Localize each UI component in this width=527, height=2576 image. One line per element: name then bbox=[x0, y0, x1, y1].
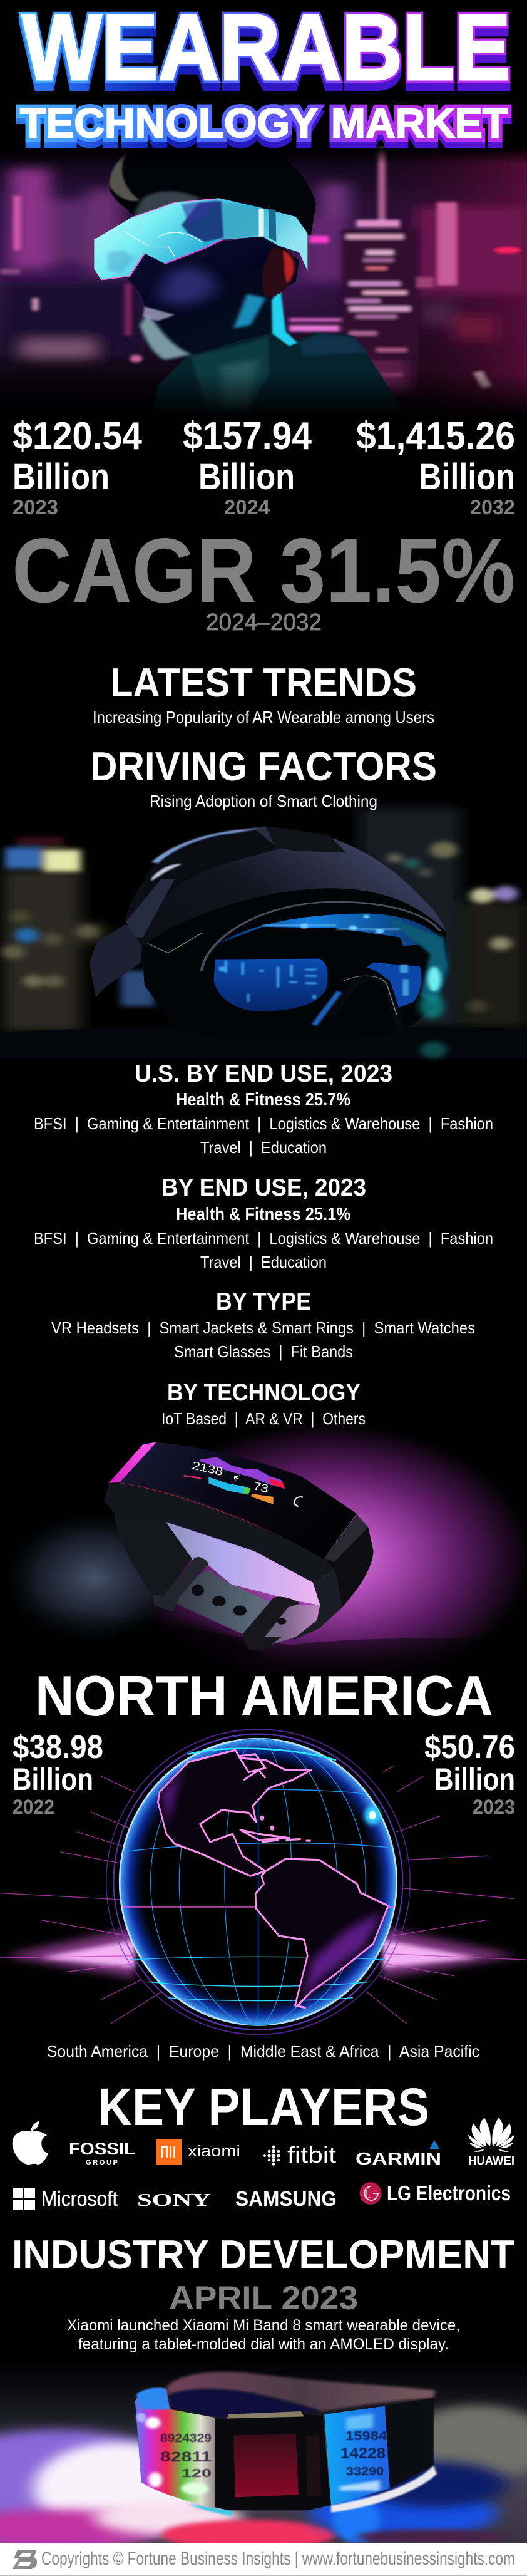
helmet upper cap bbox=[145, 830, 279, 916]
band display face bbox=[108, 1442, 357, 1560]
logo: Garmin bbox=[356, 2140, 441, 2168]
heading: industry development: INDUSTRY DEVELOPMENT bbox=[12, 2232, 514, 2277]
segment: by technology: IoT Based | AR & VR | Others bbox=[161, 1409, 366, 1428]
LED band scrolling digits: 33290 bbox=[346, 2465, 384, 2478]
LED band right panel bbox=[324, 2406, 390, 2505]
goggle nose frame bbox=[329, 978, 402, 1032]
LED band left panel bbox=[135, 2388, 215, 2508]
band display readings: 73 bbox=[252, 1479, 270, 1495]
logo: Xiaomi bbox=[156, 2139, 240, 2165]
development description: featuring a tablet-molded dial with an AMOLED display. bbox=[78, 2335, 449, 2353]
logo: Xiaomi: xiaomi bbox=[188, 2143, 240, 2160]
segment: global by end use: Health & Fitness 25.1% bbox=[176, 1204, 350, 1224]
logo: Fossil Group: FOSSIL bbox=[69, 2139, 135, 2158]
helmet visor frame bbox=[143, 888, 449, 1042]
lower white rim bbox=[331, 2466, 437, 2513]
stat: 2032 market value: 2032 bbox=[470, 496, 515, 519]
segment: U.S. by end use bbox=[34, 1060, 493, 1157]
continents outline: North and South America bbox=[158, 1750, 388, 2008]
title: TECHNOLOGY MARKET: MARKET bbox=[331, 100, 508, 146]
band icon arc bbox=[294, 1497, 303, 1506]
stat: North America 2022: Billion bbox=[13, 1762, 93, 1797]
stat: North America 2022: $38.98 bbox=[13, 1729, 103, 1766]
stat: North America 2023 bbox=[424, 1729, 515, 1818]
band clasps bbox=[152, 1557, 208, 1611]
stat: 2032 market value bbox=[356, 415, 515, 519]
city background bbox=[0, 148, 527, 415]
stat: 2024 market value: Billion bbox=[198, 457, 295, 497]
globe highlight bbox=[364, 1806, 381, 1825]
logo: Huawei: HUAWEI bbox=[468, 2154, 514, 2167]
lit inner opening bbox=[166, 1522, 320, 1605]
hero fade to black bbox=[0, 373, 527, 416]
logo: LG Electronics: L bbox=[364, 2188, 371, 2201]
title: TECHNOLOGY MARKET: TECHNOLOGY bbox=[20, 100, 318, 146]
stat: North America 2023: 2023 bbox=[473, 1796, 515, 1818]
stat: 2024 market value: $157.94 bbox=[183, 415, 312, 458]
logo: Sony: SONY bbox=[137, 2190, 211, 2210]
purple glow bbox=[0, 1424, 527, 1691]
globe illustration bbox=[0, 1729, 527, 2034]
visor right lens bbox=[366, 963, 421, 1008]
logo: Fossil Group bbox=[69, 2139, 135, 2166]
LED band illustration bbox=[0, 2361, 527, 2556]
title: TECHNOLOGY MARKET bbox=[20, 100, 508, 152]
text: driving factor detail: Rising Adoption of Smart Clothing bbox=[150, 792, 377, 810]
band side wall bbox=[105, 1482, 335, 1583]
text: latest trend detail: Increasing Popularity of AR Wearable among Users bbox=[93, 708, 434, 727]
smart band illustration bbox=[0, 1424, 527, 1691]
globe grid lines bbox=[123, 1739, 393, 2025]
logo: Fitbit: fitbit bbox=[287, 2142, 336, 2168]
rear strap bbox=[166, 2372, 435, 2411]
stat: North America 2023: $50.76 bbox=[424, 1729, 515, 1766]
heading: key players: KEY PLAYERS bbox=[98, 2077, 429, 2136]
segment: global by end use: BFSI | Gaming & Entertainment | Logistics & Warehouse | Fashion bbox=[34, 1229, 493, 1248]
reflection on ground bbox=[420, 1042, 447, 1058]
visor upper reflection bbox=[218, 913, 444, 946]
logo: Fossil Group: GROUP bbox=[86, 2159, 118, 2166]
globe light rays bbox=[0, 1766, 527, 2024]
visor left lens bbox=[214, 959, 327, 1011]
footer bar bbox=[0, 2543, 527, 2576]
logo: Microsoft bbox=[13, 2187, 118, 2210]
logo: Microsoft: Microsoft bbox=[41, 2187, 118, 2210]
segment: U.S. by end use: U.S. BY END USE, 2023 bbox=[135, 1060, 392, 1087]
globe sphere bbox=[120, 1739, 397, 2025]
stat: 2023 market value bbox=[13, 415, 142, 519]
footer logo bbox=[13, 2550, 37, 2569]
stat: 2024 market value: 2024 bbox=[224, 496, 270, 519]
helmet strap bbox=[89, 924, 141, 997]
rainbow display bars bbox=[183, 1457, 285, 1504]
development description bbox=[67, 2317, 460, 2353]
segment: U.S. by end use: BFSI | Gaming & Entertainment | Logistics & Warehouse | Fashion bbox=[34, 1114, 493, 1133]
screen edge highlight bbox=[108, 1442, 156, 1483]
development date: APRIL 2023 bbox=[169, 2280, 358, 2317]
stat: North America 2022: 2022 bbox=[13, 1796, 54, 1818]
ground bbox=[0, 1027, 527, 1058]
segment: by technology bbox=[161, 1379, 366, 1428]
floor light bbox=[0, 2361, 527, 2556]
center watch module bbox=[215, 2412, 331, 2510]
segment: by type bbox=[51, 1288, 475, 1361]
LED band scrolling digits bbox=[160, 2429, 387, 2480]
heading: driving factors: DRIVING FACTORS bbox=[90, 743, 437, 789]
helmet shell bbox=[125, 826, 449, 1042]
segment: U.S. by end use: Travel | Education bbox=[200, 1138, 327, 1157]
stat: North America 2022 bbox=[13, 1729, 103, 1818]
man's face bbox=[128, 235, 299, 360]
LED band scrolling digits: 8924329 bbox=[160, 2432, 212, 2444]
title: TECHNOLOGY MARKET: MARKET bbox=[331, 100, 508, 146]
LED band scrolling digits: 14228 bbox=[340, 2445, 386, 2462]
segment: U.S. by end use: Health & Fitness 25.7% bbox=[176, 1090, 350, 1110]
man's hoodie and neck bbox=[151, 331, 407, 415]
stat: 2032 market value: Billion bbox=[419, 457, 515, 497]
AR visor bbox=[94, 199, 307, 280]
segment: by type: Smart Glasses | Fit Bands bbox=[174, 1342, 353, 1361]
stat: 2032 market value: $1,415.26 bbox=[356, 415, 515, 458]
band right end bbox=[324, 1514, 374, 1608]
title: TECHNOLOGY MARKET: TECHNOLOGY bbox=[20, 106, 318, 152]
LED band scrolling digits: 82811 bbox=[160, 2449, 212, 2465]
stat: 2023 market value: 2023 bbox=[13, 496, 58, 519]
segment: by type: VR Headsets | Smart Jackets & Smart Rings | Smart Watches bbox=[51, 1318, 475, 1337]
segment: by technology: BY TECHNOLOGY bbox=[167, 1379, 361, 1406]
band display readings bbox=[191, 1459, 270, 1495]
hero illustration: man with AR visor in neon city bbox=[0, 148, 527, 416]
logo: Garmin: GARMIN bbox=[356, 2149, 441, 2168]
heading: North America: NORTH AMERICA bbox=[35, 1665, 493, 1728]
segment: global by end use: Travel | Education bbox=[200, 1253, 327, 1271]
logo: Samsung: SAMSUNG bbox=[235, 2187, 337, 2210]
logo: Fitbit bbox=[264, 2142, 336, 2168]
man's hair bbox=[110, 148, 316, 235]
heading: latest trends: LATEST TRENDS bbox=[110, 660, 417, 705]
dark band section bbox=[385, 2398, 434, 2488]
title: TECHNOLOGY MARKET: TECHNOLOGY bbox=[20, 100, 318, 146]
segment: by type: BY TYPE bbox=[216, 1288, 311, 1315]
LED band scrolling digits: 120 bbox=[182, 2467, 212, 2480]
band display readings: 2138 bbox=[191, 1459, 224, 1478]
CAGR period: 2024–2032 bbox=[206, 609, 322, 636]
stat: 2023 market value: Billion bbox=[13, 457, 110, 497]
stat: 2023 market value: $120.54 bbox=[13, 415, 142, 458]
segment: global by end use bbox=[34, 1174, 493, 1271]
band strap with holes bbox=[175, 1570, 320, 1645]
LED band scrolling digits: 15984 bbox=[345, 2429, 387, 2443]
logo: Apple bbox=[13, 2121, 48, 2165]
helmet illustration: smart AR helmet in night city bbox=[0, 808, 527, 1058]
title: TECHNOLOGY MARKET: MARKET bbox=[331, 106, 508, 152]
other regions list: South America | Europe | Middle East & Africa | Asia Pacific bbox=[47, 2042, 479, 2061]
blurred city lights bbox=[2, 808, 527, 1032]
logo: Huawei bbox=[468, 2118, 514, 2167]
segment: global by end use: BY END USE, 2023 bbox=[161, 1174, 366, 1201]
development description: Xiaomi launched Xiaomi Mi Band 8 smart wearable device, bbox=[67, 2317, 460, 2334]
band left textured strap bbox=[114, 1514, 192, 1595]
stat: 2024 market value bbox=[183, 415, 312, 519]
